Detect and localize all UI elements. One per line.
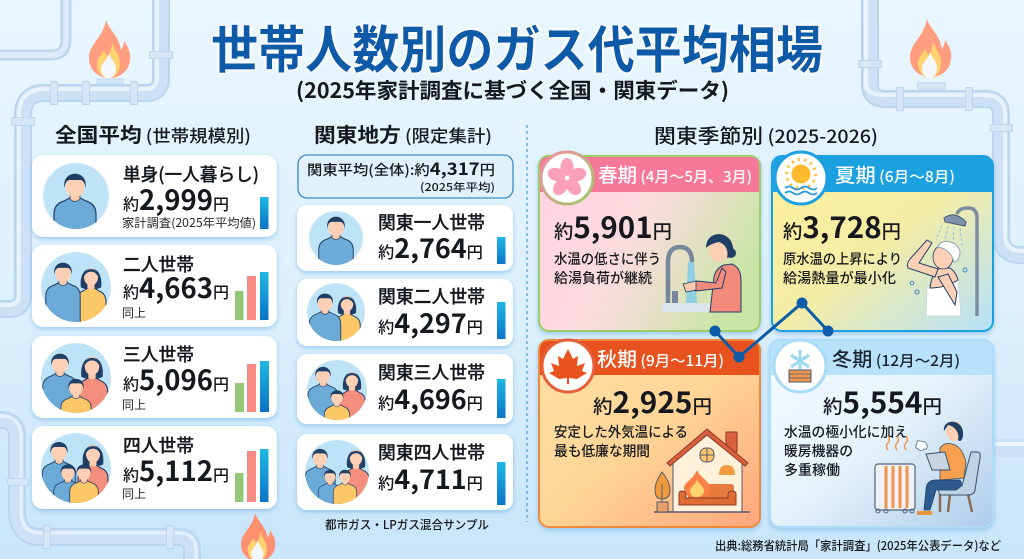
pipes: right — [990, 439, 1024, 457]
pipes: top left — [0, 0, 172, 309]
description: 給湯熱量が最小化 — [783, 268, 896, 288]
panel: national four — [32, 426, 277, 517]
source: 出典:総務省統計局「家計調査」(2025年公表データ)など — [715, 537, 1001, 554]
price: 約2,999円 — [123, 178, 229, 218]
callout sub text: (2025年平均) — [420, 179, 495, 195]
price: 約5,901円 — [554, 205, 672, 247]
panel: summer — [772, 152, 993, 331]
icon: flame top left — [89, 20, 130, 78]
heading: Kanto: 関東地方 (限定集計) — [314, 119, 492, 148]
icon: family of three — [307, 360, 367, 420]
pipes: bottom left — [0, 416, 196, 559]
panel: national three — [32, 336, 277, 435]
panel: national single — [32, 155, 277, 251]
label: 三人世帯 — [123, 341, 194, 367]
description — [783, 249, 902, 288]
panel: Kanto two — [297, 279, 513, 354]
note: 同上 — [122, 396, 146, 413]
icon: flame top right — [910, 19, 951, 79]
label: 関東三人世帯 — [378, 359, 485, 385]
icon: family of four — [41, 433, 111, 503]
description: 安定した外気温による — [554, 422, 688, 442]
icon: family of four — [305, 440, 369, 504]
price: 約2,925円 — [593, 380, 712, 422]
price: 約4,297円 — [378, 302, 483, 341]
bar — [260, 197, 268, 229]
icon: couple — [307, 283, 365, 341]
icon: cherry blossom — [541, 152, 593, 204]
note: 同上 — [122, 485, 146, 502]
bar — [497, 237, 506, 264]
icon: maple leaf — [542, 340, 594, 392]
label: 関東一人世帯 — [378, 209, 485, 235]
panel: Kanto one — [297, 205, 513, 280]
header band — [771, 341, 992, 375]
price: 約4,696円 — [378, 378, 483, 417]
season name: 春期 (4月〜5月、3月) — [598, 159, 752, 188]
icon: family of three — [41, 343, 111, 413]
heading: seasonal: 関東季節別 (2025-2026) — [654, 120, 878, 149]
label: 四人世帯 — [123, 432, 194, 458]
header band — [540, 341, 759, 375]
description — [554, 422, 688, 461]
pipes: top right — [858, 0, 1024, 255]
season name: 秋期 (9月〜11月) — [597, 343, 724, 372]
bar — [497, 302, 506, 339]
header band — [773, 157, 992, 192]
panel: autumn — [539, 340, 760, 527]
bars — [235, 272, 268, 320]
price: 約2,764円 — [378, 227, 483, 266]
bar — [497, 379, 506, 418]
season name: 冬期 (12月〜2月) — [832, 343, 960, 372]
bar — [497, 462, 506, 505]
bars — [235, 361, 269, 412]
price: 約3,728円 — [783, 205, 901, 247]
illustration: house — [654, 429, 750, 512]
icon: sun and waves — [775, 152, 827, 204]
panel: Kanto three — [297, 354, 513, 437]
description: 水温の極小化に加え — [784, 422, 908, 442]
illustration: hand washing — [662, 234, 741, 312]
subtitle: (2025年家計調査に基づく全国・関東データ) — [296, 75, 729, 105]
icon: snow and heater — [774, 340, 826, 392]
note: sample: 都市ガス・LPガス混合サンプル — [325, 516, 489, 533]
panel: spring — [539, 152, 760, 331]
description: 暖房機器の — [784, 441, 853, 461]
title: 世帯人数別のガス代平均相場 — [211, 9, 823, 83]
price: 約4,711円 — [378, 458, 483, 497]
season name: 夏期 (6月〜8月) — [835, 159, 955, 188]
description — [554, 249, 661, 288]
price: 約5,112円 — [123, 449, 229, 489]
callout main text: 関東平均(全体):約 4,317 円 — [307, 155, 495, 180]
callout: Kanto average — [298, 155, 513, 198]
description — [784, 422, 908, 480]
description: 多重稼働 — [784, 460, 840, 480]
label: 単身(一人暮らし) — [123, 161, 259, 187]
icon: person — [43, 163, 109, 229]
label: 関東四人世帯 — [378, 439, 485, 465]
note: 同上 — [122, 304, 146, 321]
icon: couple — [41, 252, 111, 322]
icon: person — [309, 211, 363, 265]
icon: flame bottom — [241, 513, 275, 559]
note: 家計調査(2025年平均値) — [122, 214, 256, 231]
line chart — [710, 298, 834, 362]
price: 約5,554円 — [823, 380, 942, 422]
bars — [235, 449, 268, 502]
description: 給湯負荷が継続 — [554, 268, 652, 288]
divider — [526, 125, 528, 522]
price: 約5,096円 — [123, 358, 229, 398]
description: 水温の低さに伴う — [554, 249, 661, 269]
illustration: woman with heater — [875, 421, 980, 515]
illustration: shower — [907, 208, 977, 316]
panel: national two — [32, 245, 277, 334]
heading: national: 全国平均 (世帯規模別) — [55, 119, 251, 148]
label: 関東二人世帯 — [378, 283, 485, 309]
description: 原水温の上昇により — [783, 249, 902, 269]
price: 約4,663円 — [123, 266, 229, 306]
header band — [540, 157, 759, 192]
label: 二人世帯 — [123, 251, 194, 277]
panel: winter — [770, 340, 993, 527]
description: 最も低廉な期間 — [554, 441, 650, 461]
panel: Kanto four — [297, 434, 513, 513]
